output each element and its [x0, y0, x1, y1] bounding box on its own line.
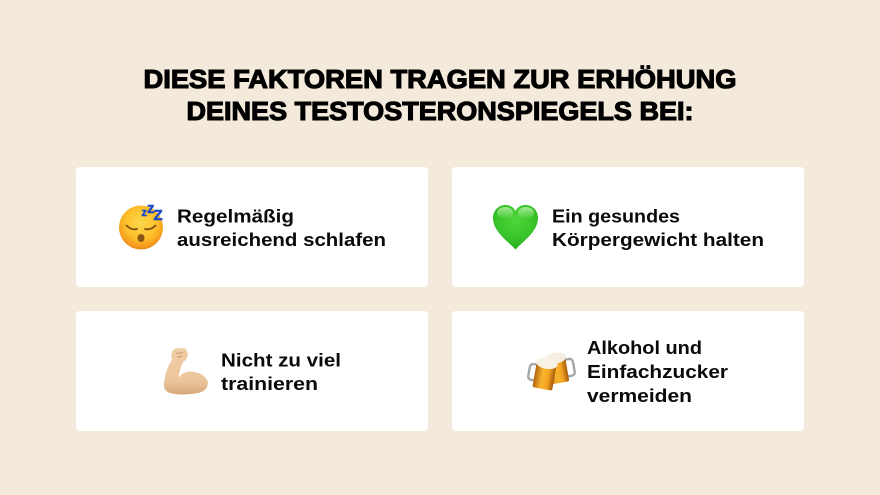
text: training	[221, 350, 341, 394]
icon: sleeping face: z	[147, 200, 154, 217]
text: sleep: Regelmäßig	[177, 206, 294, 226]
panel: training	[76, 311, 428, 431]
text: body weight	[552, 206, 764, 250]
text: sleep: ausreichend schlafen	[177, 229, 386, 250]
icon: flexed arm	[164, 348, 208, 394]
icon: sleeping face: Z	[154, 207, 163, 224]
text: body weight: Körpergewicht halten	[552, 229, 764, 250]
panel: body weight	[452, 167, 804, 287]
text: sleep	[177, 206, 386, 250]
title: DEINES TESTOSTERONSPIEGELS BEI:	[186, 98, 694, 126]
title: DIESE FAKTOREN TRAGEN ZUR ERHÖHUNG	[144, 65, 736, 94]
title	[144, 65, 736, 126]
panel: sleep	[76, 167, 428, 287]
panel: alcohol	[452, 311, 804, 431]
text: alcohol: Alkohol und	[587, 337, 702, 358]
icon: green heart	[493, 205, 538, 250]
text: body weight: Ein gesundes	[552, 206, 680, 226]
text: training: trainieren	[221, 373, 318, 394]
text: alcohol: Einfachzucker	[587, 361, 728, 382]
icon: sleeping face	[119, 200, 163, 250]
icon: beer mugs	[526, 350, 576, 391]
text: training: Nicht zu viel	[221, 350, 341, 370]
text: alcohol: vermeiden	[587, 385, 692, 406]
text: alcohol	[587, 337, 728, 406]
icon: sleeping face: z	[142, 207, 148, 219]
